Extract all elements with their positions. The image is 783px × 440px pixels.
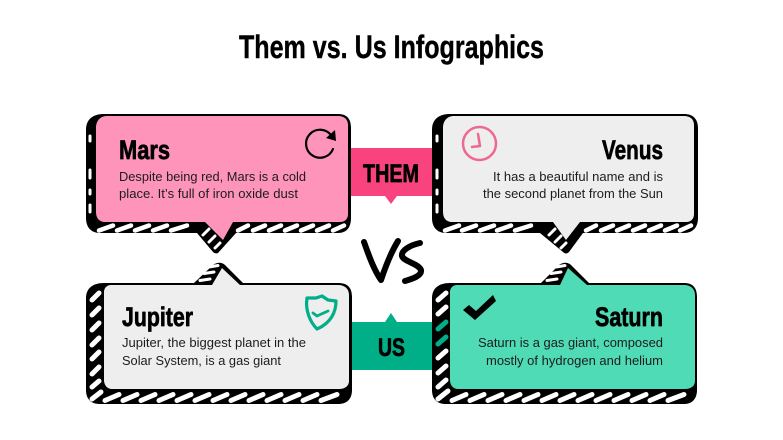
Mars face xyxy=(96,116,348,240)
Venus card depth xyxy=(432,114,698,254)
title: Them vs. Us Infographics xyxy=(239,29,544,65)
panel: Jupiter xyxy=(86,263,352,404)
icon: refresh xyxy=(306,130,336,158)
Jupiter heading: Jupiter xyxy=(122,302,193,332)
Saturn heading: Saturn xyxy=(595,302,663,332)
banner: US: US xyxy=(378,334,405,362)
Jupiter hatching xyxy=(92,293,337,400)
Jupiter text: Jupiter, the biggest planet in the xyxy=(122,336,306,350)
banner: THEM: THEM xyxy=(363,160,419,188)
VS hand-drawn lettering xyxy=(364,241,421,281)
Venus text: the second planet from the Sun xyxy=(483,187,663,201)
Mars hatching xyxy=(99,226,344,230)
Venus text xyxy=(483,170,663,201)
Mars text xyxy=(119,170,306,201)
banner: US xyxy=(350,313,434,370)
Saturn text xyxy=(478,336,663,368)
Venus heading: Venus xyxy=(602,135,663,165)
Jupiter text: Solar System, is a gas giant xyxy=(122,354,282,368)
Saturn text: mostly of hydrogen and helium xyxy=(486,354,663,368)
Saturn face xyxy=(450,268,695,389)
banner: THEM xyxy=(350,148,434,204)
Venus hatching xyxy=(445,226,691,230)
Saturn hatching over banner xyxy=(438,322,446,344)
icon: shield xyxy=(307,296,336,329)
Jupiter text xyxy=(122,336,306,368)
Saturn hatching xyxy=(438,293,684,400)
Venus side and tail hatching xyxy=(437,136,566,248)
Venus text: It has a beautiful name and is xyxy=(493,170,663,184)
panel: Mars xyxy=(86,114,351,253)
Venus face xyxy=(443,116,694,240)
icon: clock xyxy=(463,127,496,160)
Jupiter face xyxy=(104,268,349,389)
panel: Saturn xyxy=(432,263,697,404)
Mars side and tail hatching xyxy=(90,136,220,248)
Mars text: place. It’s full of iron oxide dust xyxy=(119,187,299,201)
Saturn card depth xyxy=(432,263,697,404)
Mars heading: Mars xyxy=(119,135,170,165)
panel: Venus xyxy=(432,114,698,254)
Mars card depth xyxy=(86,114,351,253)
Jupiter card depth xyxy=(86,263,352,404)
Saturn tail hatching xyxy=(547,266,565,280)
Saturn text: Saturn is a gas giant, composed xyxy=(478,336,663,350)
icon: check mark xyxy=(463,295,496,320)
Jupiter tail hatching xyxy=(200,266,218,280)
Mars text: Despite being red, Mars is a cold xyxy=(119,170,306,184)
